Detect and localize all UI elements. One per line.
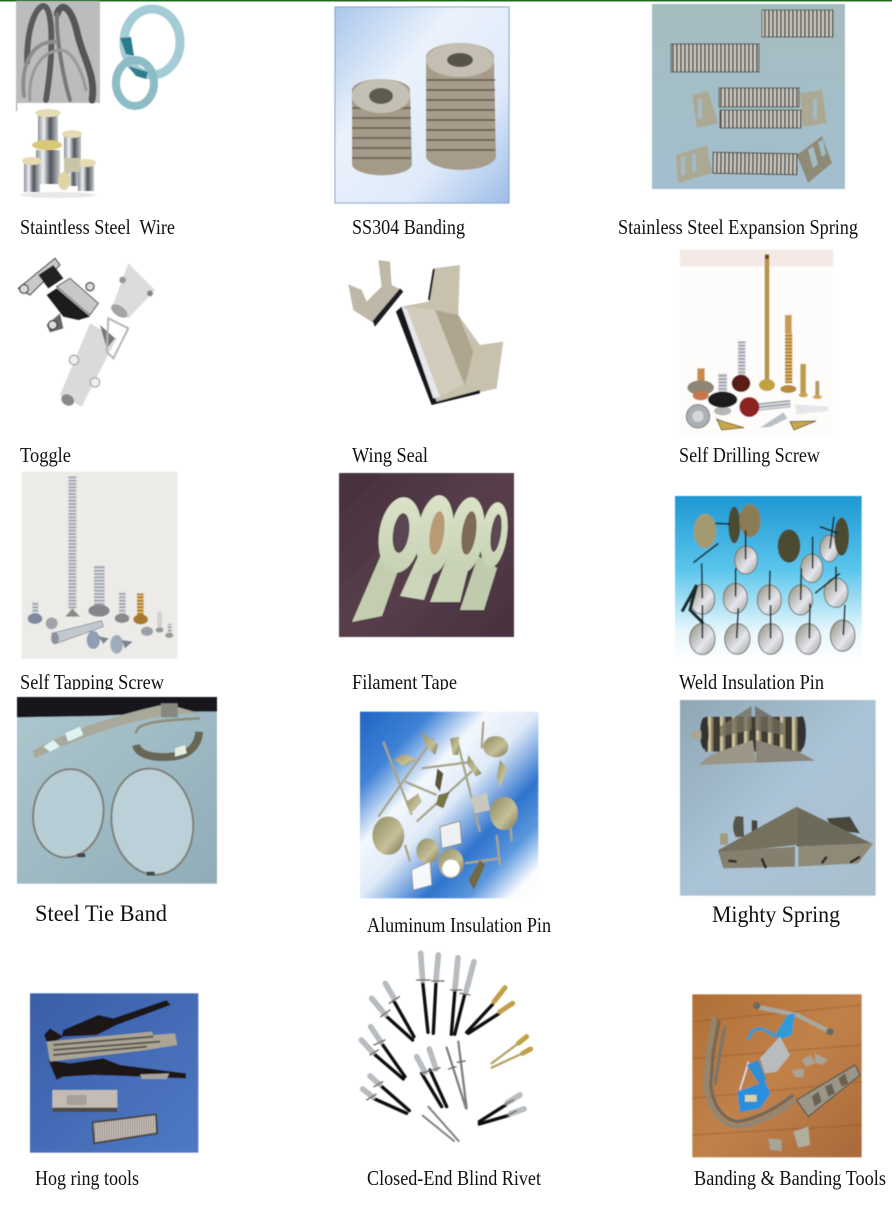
photo: wire spools <box>20 109 96 198</box>
label: rivet: Closed-End Blind Rivet <box>367 1166 541 1190</box>
photo: banding stacks <box>335 7 509 203</box>
photo: rivets <box>361 953 531 1141</box>
label: aluminum pin: Aluminum Insulation Pin <box>367 913 551 937</box>
photo: wing seals <box>348 260 503 405</box>
panel: hog ring tools <box>30 993 198 1190</box>
label: drilling screw: Self Drilling Screw <box>679 443 821 467</box>
label: wing seal: Wing Seal <box>352 443 428 467</box>
panel: mighty spring <box>680 700 876 927</box>
panel: aluminum insulation pin <box>360 712 551 937</box>
label: spring: Stainless Steel Expansion Spring <box>618 215 858 239</box>
panel: self tapping screw <box>20 472 178 694</box>
label: toggle: Toggle <box>20 443 71 467</box>
panel: wing seal <box>348 260 503 467</box>
label: tie band: Steel Tie Band <box>35 901 167 926</box>
label: wire: Staintless Steel Wire <box>20 215 175 239</box>
panel: steel tie band <box>17 697 217 926</box>
panel: filament tape <box>339 473 514 694</box>
photo: wire coils <box>16 1 100 111</box>
label: mighty spring: Mighty Spring <box>712 902 840 927</box>
photo: hog ring tool <box>30 993 198 1153</box>
panel: stainless steel wire <box>16 1 180 239</box>
label: hog ring: Hog ring tools <box>35 1166 139 1190</box>
photo: banding tools on wood <box>692 994 862 1157</box>
photo: weld pins <box>675 496 862 661</box>
photo: tape rolls <box>339 473 514 637</box>
panel: self drilling screw <box>679 250 833 467</box>
photo: toggle latches <box>18 258 155 408</box>
panel: expansion spring <box>618 4 858 239</box>
photo: tapping screws <box>22 472 178 659</box>
photo: blue wire rings <box>116 9 180 106</box>
photo: mighty springs <box>680 700 876 896</box>
panel: blind rivet <box>361 953 541 1190</box>
top border line <box>0 0 892 2</box>
photo: drilling screws <box>680 250 833 437</box>
label: tapping screw: Self Tapping Screw <box>20 670 165 694</box>
panel: toggle <box>18 258 155 467</box>
panel: SS304 banding <box>335 7 509 239</box>
photo: tie bands <box>17 697 217 884</box>
label: banding: SS304 Banding <box>352 215 465 239</box>
panel: banding tools <box>692 994 886 1190</box>
panel: weld insulation pin <box>675 496 862 694</box>
label: filament tape: Filament Tape <box>352 670 457 694</box>
photo: springs on blue-grey <box>652 4 845 189</box>
label: weld pin: Weld Insulation Pin <box>679 670 824 694</box>
photo: aluminum pins <box>360 712 538 898</box>
